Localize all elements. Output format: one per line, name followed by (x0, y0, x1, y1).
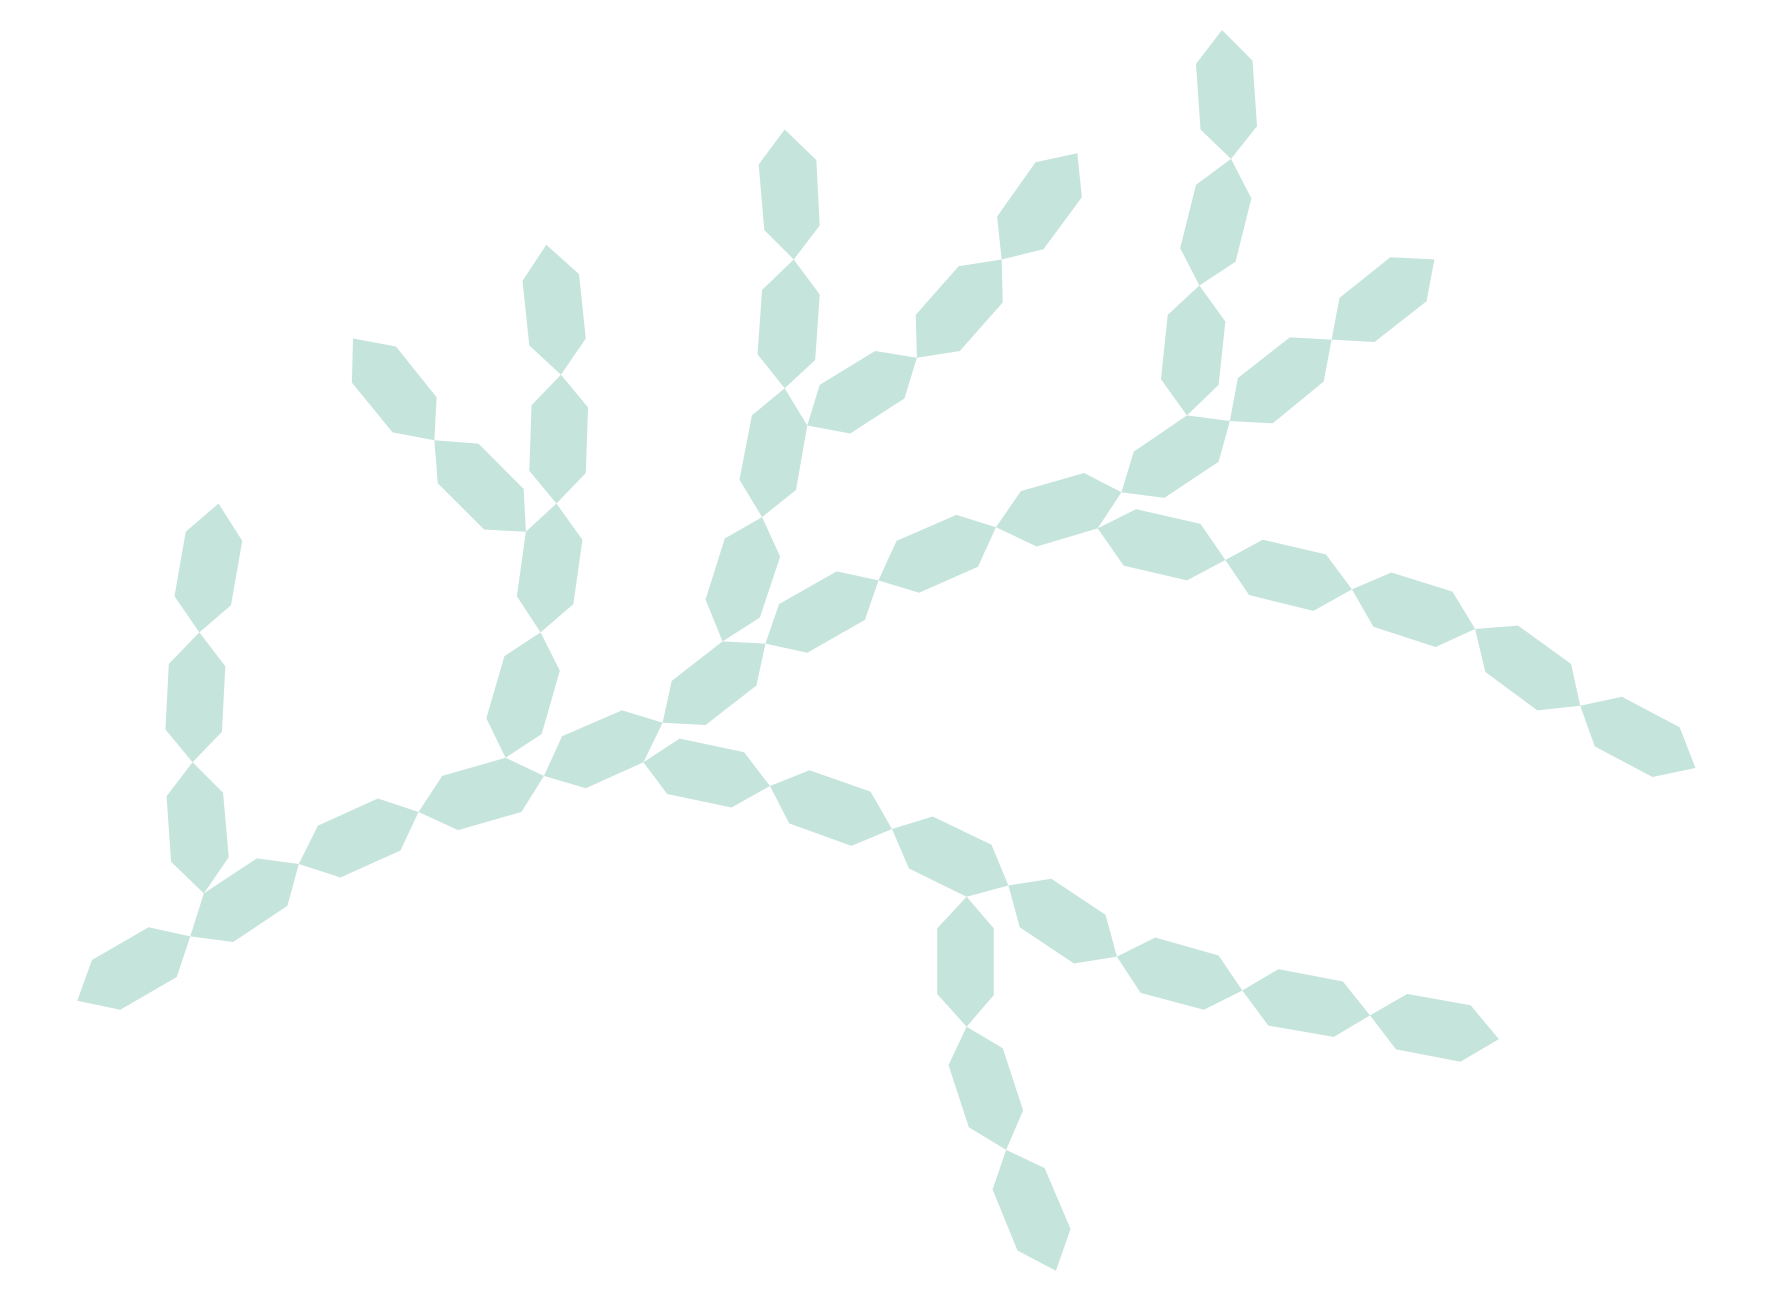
branch: upper left arm (352, 339, 526, 532)
branch: centre upper right (807, 153, 1082, 433)
branch: lower downward arm (937, 897, 1071, 1271)
branch: centre left vertical (486, 245, 588, 758)
branch: main stem from lower left to top right (77, 257, 1434, 1010)
branch: far left vertical (165, 504, 242, 893)
branch: top right vertical (1161, 30, 1257, 415)
branch: lower right arm (643, 739, 1499, 1062)
branch: centre vertical (706, 129, 820, 641)
branch: right arm (1098, 509, 1695, 777)
